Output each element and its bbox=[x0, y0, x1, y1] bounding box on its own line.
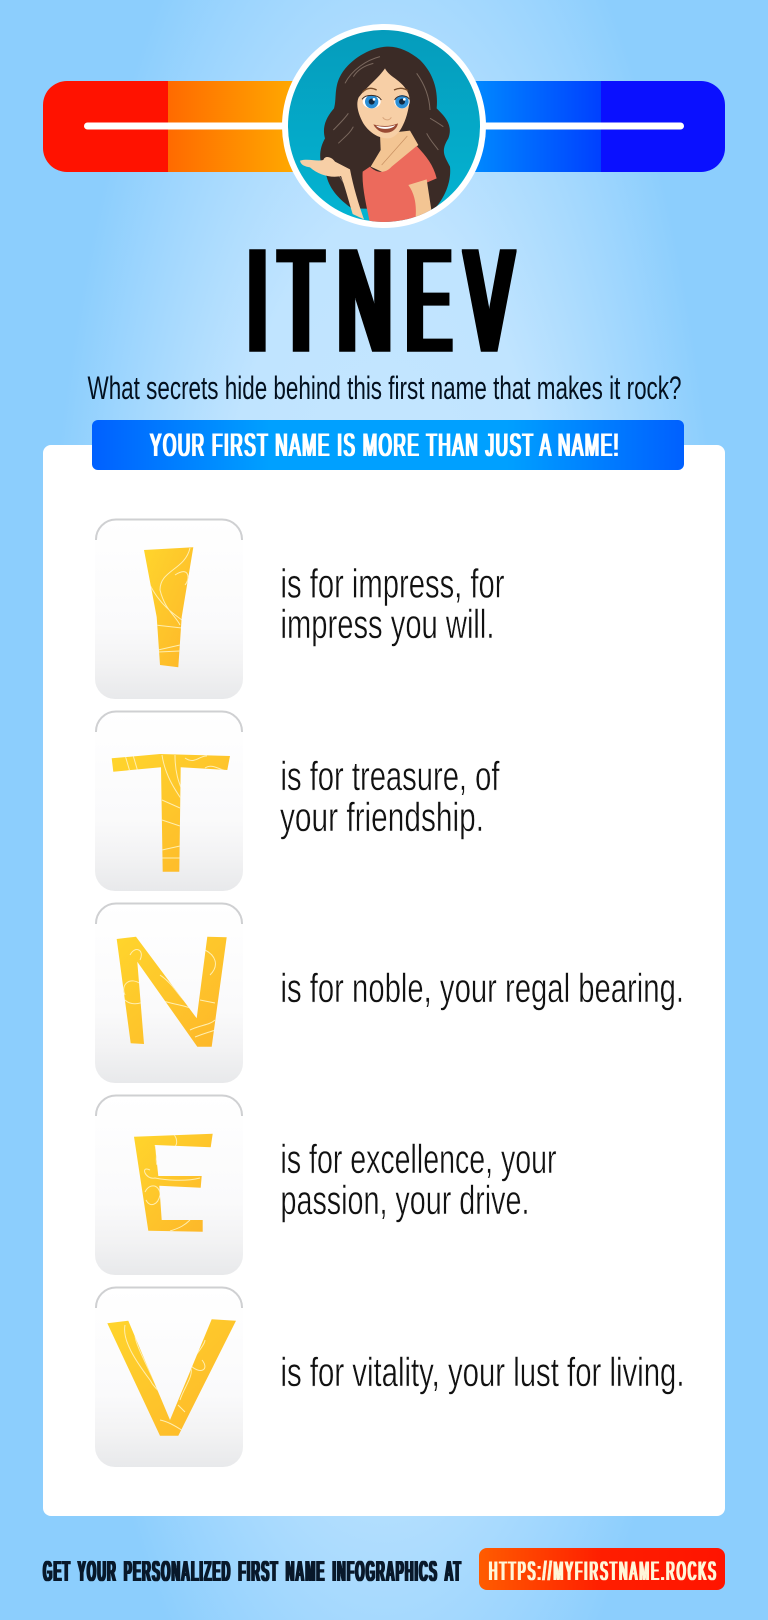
text I: is for impress, for bbox=[280, 561, 504, 607]
title: ITNEV: N bbox=[338, 218, 391, 382]
arm and hand bbox=[300, 157, 364, 219]
title: ITNEV: E bbox=[407, 218, 451, 382]
header colour bar bbox=[43, 81, 725, 172]
text E: passion, your drive. bbox=[280, 1177, 530, 1223]
mouth bbox=[373, 123, 398, 133]
nose bbox=[383, 117, 391, 120]
row E bbox=[95, 1095, 556, 1275]
row N bbox=[95, 903, 684, 1083]
eyes bbox=[363, 95, 381, 108]
white content panel bbox=[43, 445, 725, 1516]
title: ITNEV bbox=[248, 218, 512, 383]
tile E bbox=[95, 1095, 243, 1275]
letter I bbox=[144, 547, 193, 667]
banner bbox=[92, 420, 684, 470]
title: ITNEV: T bbox=[280, 219, 323, 383]
shirt bbox=[363, 146, 437, 223]
text I: impress you will. bbox=[280, 601, 494, 647]
text E bbox=[280, 1136, 556, 1223]
row V bbox=[95, 1287, 684, 1467]
row T bbox=[95, 711, 500, 891]
neck and chest bbox=[371, 131, 418, 173]
title: ITNEV: V bbox=[466, 220, 512, 383]
title: ITNEV: I bbox=[248, 220, 267, 383]
row I bbox=[95, 519, 504, 699]
letter N bbox=[117, 937, 227, 1047]
hair bbox=[320, 47, 450, 210]
text I bbox=[280, 561, 504, 647]
text T: your friendship. bbox=[280, 794, 484, 840]
letter V bbox=[107, 1319, 236, 1436]
letter E bbox=[134, 1134, 213, 1232]
text T bbox=[280, 753, 500, 840]
text T: is for treasure, of bbox=[280, 753, 500, 799]
footer url button bbox=[479, 1548, 725, 1590]
tile N bbox=[95, 903, 243, 1083]
text E: is for excellence, your bbox=[280, 1136, 556, 1182]
tile V bbox=[95, 1287, 243, 1467]
letter T bbox=[112, 754, 230, 872]
tile I bbox=[95, 519, 243, 699]
face bbox=[357, 68, 410, 138]
tile T bbox=[95, 711, 243, 891]
avatar portrait bbox=[282, 24, 486, 228]
